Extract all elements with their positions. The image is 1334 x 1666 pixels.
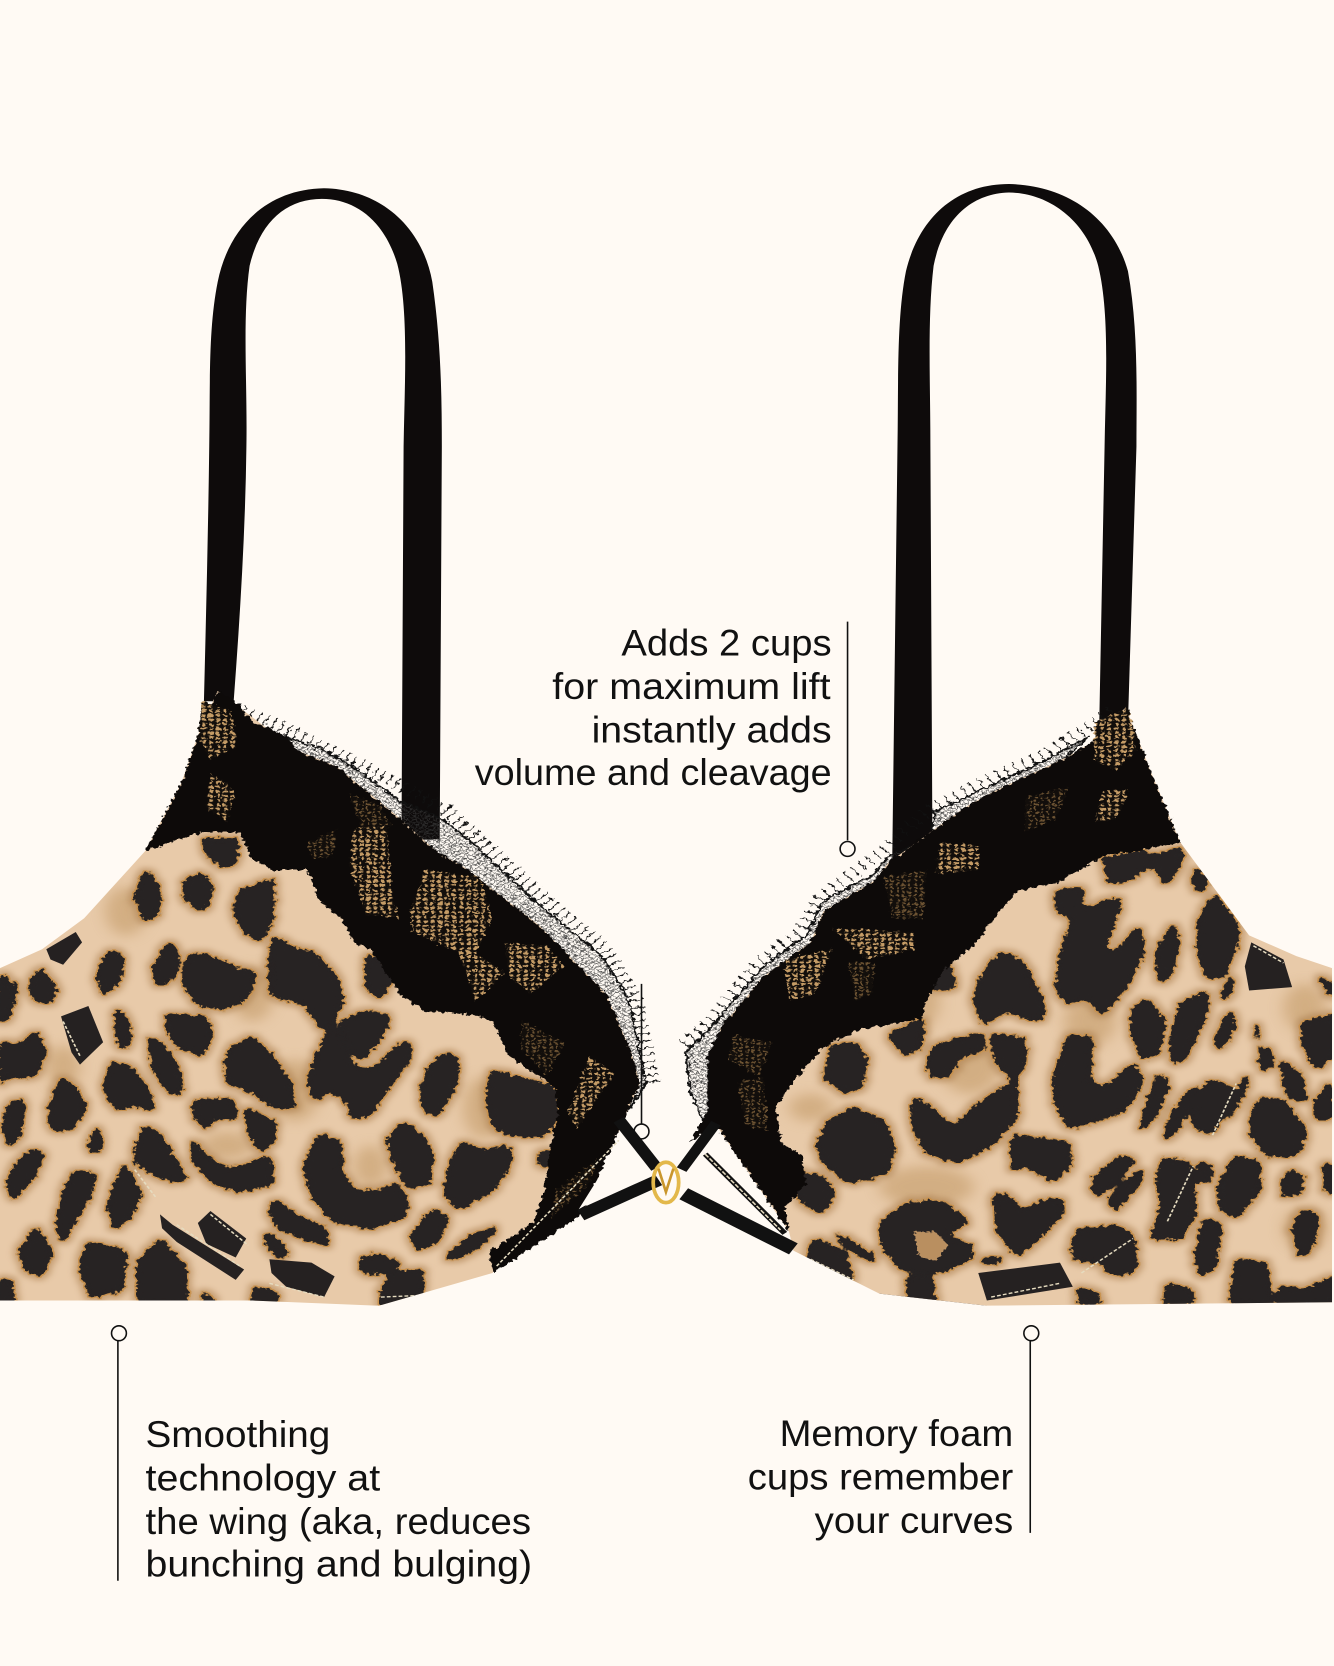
callout text: smoothing technology: bunching and bulging) [146,1542,532,1584]
callout text: memory foam: Memory foam [780,1412,1013,1454]
left lace scallop mesh [269,732,646,1111]
callout text: memory foam [748,1412,1013,1541]
right cup [656,677,1334,1309]
callout text: adds 2 cups: instantly adds [592,709,832,751]
callout: memory foam [748,1326,1039,1541]
right eyelash fringe [679,712,1112,1049]
callout text: smoothing technology [146,1413,532,1584]
right cup underwire bands [879,942,1292,1309]
callout text: smoothing technology: technology at [146,1456,381,1498]
right lace scallop mesh [686,736,1090,1121]
callout: smoothing technology [112,1326,532,1584]
right cup stitching [811,946,1284,1297]
left cup leopard spots [0,839,558,1306]
left cup fabric [0,677,669,1307]
right shoulder strap [892,184,1137,866]
callout text: adds 2 cups: volume and cleavage [475,751,832,793]
callout leader: memory foam [1024,1326,1039,1533]
callout leader: smoothing technology [112,1326,126,1581]
right cup spot tan centre [914,1232,948,1261]
left cup stitching [63,1022,421,1297]
right cup leopard spots [793,848,1334,1304]
left gore straps and gap [497,1120,659,1266]
callout text: adds 2 cups: for maximum lift [552,665,831,707]
left shoulder strap [204,188,442,839]
callout leader: center gore [634,984,649,1139]
callout: adds 2 cups [475,622,855,856]
callout text: memory foam: your curves [815,1499,1013,1541]
callout text: adds 2 cups [475,622,832,793]
callout leader: adds 2 cups [840,622,855,856]
left cup underwire bands [46,932,335,1297]
right gore straps and gap [682,1123,793,1249]
left cup black lace panel [145,691,640,1272]
left eyelash fringe [236,708,653,1084]
left cup [0,677,669,1307]
callout text: memory foam: cups remember [748,1455,1013,1497]
right cup black lace panel [690,707,1180,1232]
right cup fabric [719,706,1332,1306]
callout text: adds 2 cups: Adds 2 cups [621,622,832,664]
icon: gold logo charm [653,1162,679,1203]
callout text: smoothing technology: Smoothing [146,1413,330,1455]
callout text: smoothing technology: the wing (aka, reduces [146,1500,531,1542]
